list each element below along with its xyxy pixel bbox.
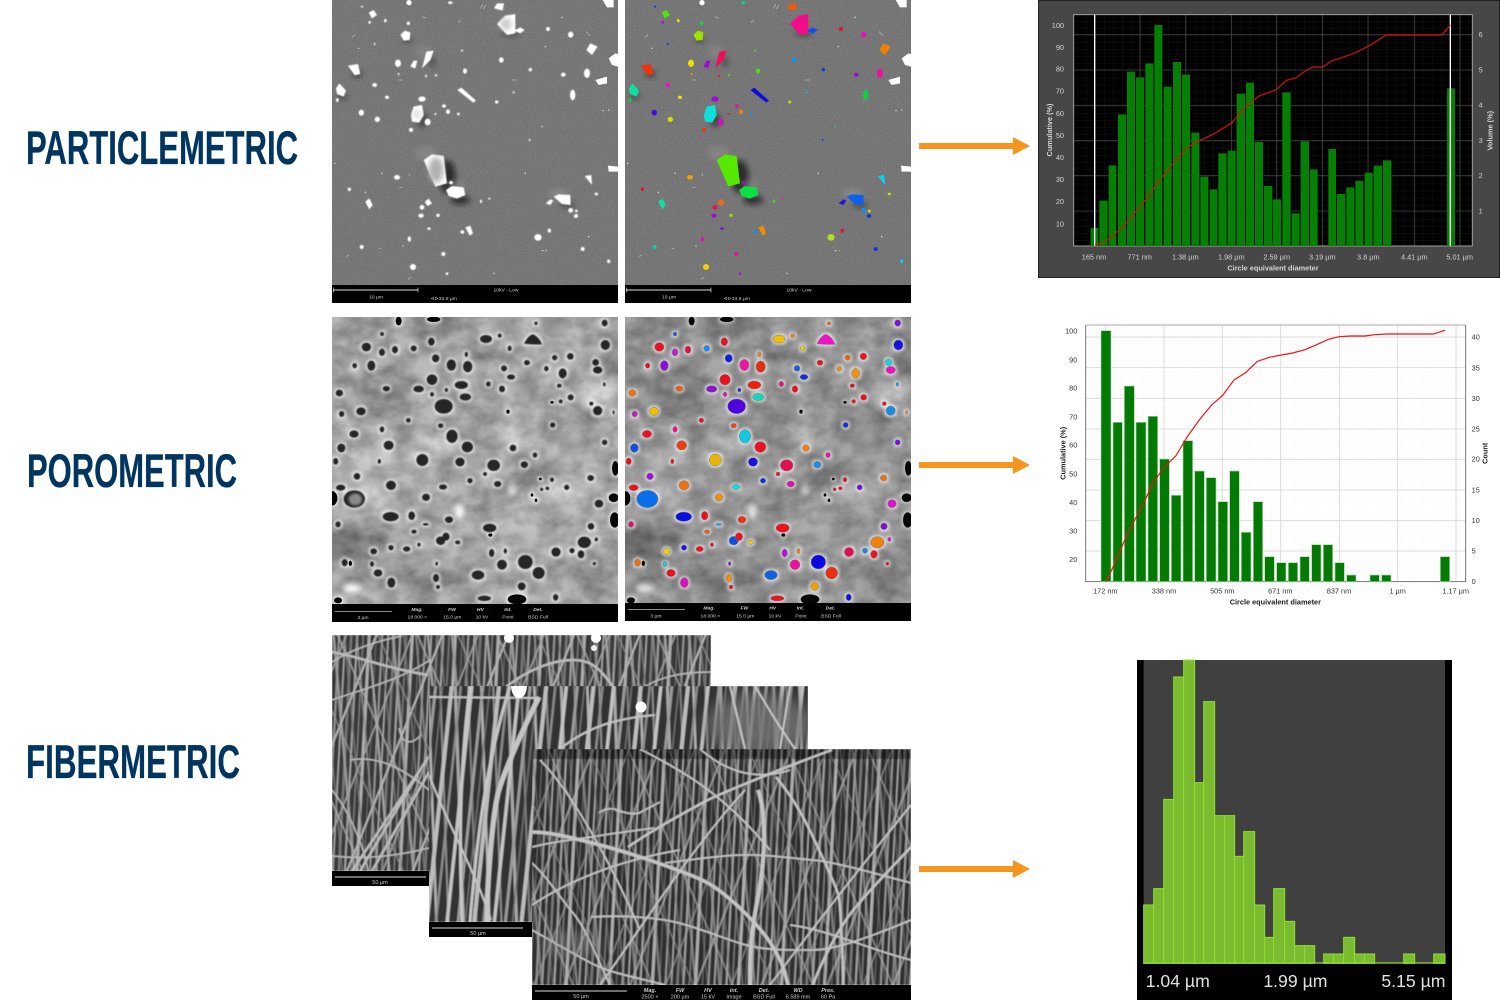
chart: particle size histogram, dark: 1.38 µm xyxy=(1172,253,1199,262)
panel: fiber SEM image, front: 50 µm xyxy=(573,994,589,1000)
chart: particle size histogram, dark: 90 xyxy=(1056,43,1064,52)
panel: pore SEM image, segmented xyxy=(612,308,918,621)
panel: fiber SEM image, front: WD xyxy=(793,988,803,994)
panel: pore SEM image, segmented: 10 kV xyxy=(769,613,782,619)
chart: particle size histogram, dark: 100 xyxy=(1052,21,1064,30)
chart: particle size histogram, dark: 50 xyxy=(1056,131,1064,140)
panel: pore SEM image, raw: BSD Full xyxy=(528,615,548,621)
chart: particle size histogram, dark: 165 nm xyxy=(1082,253,1106,262)
chart: pore size histogram, light xyxy=(1058,325,1489,607)
chart: pore size histogram, light: 50 xyxy=(1069,469,1077,478)
chart: pore size histogram, light: 30 xyxy=(1472,394,1480,403)
chart: pore size histogram, light: 671 nm xyxy=(1268,587,1293,596)
panel: particle SEM image, raw xyxy=(332,0,618,303)
panel: pore SEM image, segmented: FW xyxy=(740,606,750,612)
panel: pore SEM image, raw: Mag. xyxy=(411,607,423,613)
heading: POROMETRIC: POROMETRIC xyxy=(27,444,237,497)
panel: fiber SEM image, front: Int. xyxy=(730,988,739,994)
chart: particle size histogram, dark: Circle equivalent diameter xyxy=(1227,264,1319,273)
panel: fiber SEM image, front: FW xyxy=(676,988,685,994)
chart: pore size histogram, light: 837 nm xyxy=(1327,587,1351,596)
chart: particle size histogram, dark: 5 xyxy=(1479,65,1483,74)
chart: pore size histogram, light: 172 nm xyxy=(1093,587,1118,596)
chart: pore size histogram, light: 0 xyxy=(1472,577,1476,586)
chart: particle size histogram, dark: 3.19 µm xyxy=(1309,253,1336,262)
panel: particle SEM image, segmented: ⊲⊳33.6 µm xyxy=(723,296,750,302)
chart: pore size histogram, light: Cumulative (%) xyxy=(1058,426,1067,480)
panel: particle SEM image, segmented: 10kV - Low xyxy=(787,288,812,294)
chart: fiber diameter histogram xyxy=(1137,660,1452,1000)
chart: pore size histogram, light: 90 xyxy=(1069,355,1077,364)
panel: particle SEM image, raw: 10kV - Low xyxy=(494,288,519,294)
chart: fiber diameter histogram: 1.99 µm xyxy=(1263,971,1327,991)
chart: pore size histogram, light: 15 xyxy=(1472,485,1480,494)
chart: pore size histogram, light: Count xyxy=(1480,442,1489,464)
chart: particle size histogram, dark: 6 xyxy=(1479,30,1483,39)
arrow: pore image to chart xyxy=(919,456,1030,474)
chart: particle size histogram, dark: 4.41 µm xyxy=(1401,253,1428,262)
panel: fiber SEM image, front: Det. xyxy=(759,988,770,994)
chart: pore size histogram, light: 1 µm xyxy=(1389,587,1406,596)
panel: pore SEM image, segmented: 3 µm xyxy=(650,614,662,620)
chart: pore size histogram, light: 20 xyxy=(1472,455,1480,464)
panel: pore SEM image, raw: FW xyxy=(448,607,457,613)
panel: pore SEM image, raw: HV xyxy=(477,607,484,613)
chart: particle size histogram, dark: 5.01 µm xyxy=(1446,253,1473,262)
bars xyxy=(1091,25,1455,246)
chart: pore size histogram, light: 70 xyxy=(1069,412,1077,421)
chart: particle size histogram, dark: 2 xyxy=(1479,171,1483,180)
chart: pore size histogram, light: 40 xyxy=(1069,498,1077,507)
chart: particle size histogram, dark: 3.8 µm xyxy=(1357,253,1380,262)
panel: pore SEM image, raw: Int. xyxy=(504,607,512,613)
chart: particle size histogram, dark: 30 xyxy=(1056,175,1064,184)
chart: particle size histogram, dark: 1.98 µm xyxy=(1218,253,1245,262)
panel: pore SEM image, raw: 18 000 × xyxy=(408,615,427,621)
chart: particle size histogram, dark: 2.59 µm xyxy=(1263,253,1290,262)
chart: pore size histogram, light: 35 xyxy=(1472,363,1480,372)
chart: particle size histogram, dark: 80 xyxy=(1056,65,1064,74)
chart: particle size histogram, dark: 4 xyxy=(1479,101,1483,110)
chart: pore size histogram, light: 40 xyxy=(1472,333,1480,342)
panel: fiber SEM image, middle xyxy=(429,686,815,937)
chart: pore size histogram, light: 5 xyxy=(1472,546,1476,555)
chart: pore size histogram, light: 100 xyxy=(1065,327,1077,336)
panel: pore SEM image, raw xyxy=(319,308,625,622)
chart: pore size histogram, light: 25 xyxy=(1472,425,1480,434)
panel: pore SEM image, segmented: 18 000 × xyxy=(701,613,720,619)
arrow: fiber image to chart xyxy=(919,860,1030,878)
chart: pore size histogram, light: 80 xyxy=(1069,384,1077,393)
chart: pore size histogram, light: 20 xyxy=(1069,555,1077,564)
panel: fiber SEM image, front: Mag. xyxy=(644,988,657,994)
panel: pore SEM image, raw: 10 kV xyxy=(476,615,489,621)
chart: particle size histogram, dark: 70 xyxy=(1056,87,1064,96)
heading: PARTICLEMETRIC: PARTICLEMETRIC xyxy=(26,121,298,174)
chart: particle size histogram, dark xyxy=(1038,0,1500,278)
chart: pore size histogram, light: 30 xyxy=(1069,526,1077,535)
heading: FIBERMETRIC: FIBERMETRIC xyxy=(26,735,240,788)
panel: fiber SEM image, front: Pres. xyxy=(821,988,835,994)
panel: fiber SEM image, middle: 50 µm xyxy=(470,931,486,937)
chart: pore size histogram, light: 1.17 µm xyxy=(1442,587,1469,596)
panel: pore SEM image, segmented: HV xyxy=(769,606,777,612)
cumulative curve xyxy=(1095,25,1450,245)
panel: pore SEM image, raw: Point xyxy=(502,615,514,621)
chart: particle size histogram, dark: 771 nm xyxy=(1127,253,1152,262)
panel: particle SEM image, raw: ⊲⊳33.6 µm xyxy=(430,296,457,302)
panel: fiber SEM image, front xyxy=(532,749,911,1000)
panel: pore SEM image, segmented: Point xyxy=(795,613,807,619)
arrow: particle image to chart xyxy=(919,137,1030,155)
panel: particle SEM image, raw: 10 µm xyxy=(369,294,383,300)
chart: pore size histogram, light: 338 nm xyxy=(1152,587,1176,596)
panel: fiber SEM image, front: HV xyxy=(704,988,713,994)
chart: pore size histogram, light: Circle equivalent diameter xyxy=(1230,598,1321,607)
panel: fiber SEM image, back: 50 µm xyxy=(372,880,388,886)
panel: pore SEM image, segmented: Det. xyxy=(826,606,835,612)
panel: pore SEM image, segmented: Mag. xyxy=(703,606,715,612)
panel: pore SEM image, raw: 3 µm xyxy=(357,615,369,621)
chart: fiber diameter histogram: 1.04 µm xyxy=(1146,971,1210,991)
chart: particle size histogram, dark: Volume (%) xyxy=(1485,110,1494,150)
panel: pore SEM image, segmented: Int. xyxy=(797,606,804,612)
panel: particle SEM image, segmented: 10 µm xyxy=(662,294,676,300)
panel: pore SEM image, segmented: 15.0 µm xyxy=(736,613,754,619)
chart: pore size histogram, light: 60 xyxy=(1069,441,1077,450)
panel: particle SEM image, segmented xyxy=(625,0,911,303)
chart: particle size histogram, dark: 1 xyxy=(1479,206,1483,215)
chart: pore size histogram, light: 10 xyxy=(1472,516,1480,525)
chart: particle size histogram, dark: 40 xyxy=(1056,153,1064,162)
chart: pore size histogram, light: 505 nm xyxy=(1210,587,1235,596)
chart: particle size histogram, dark: 60 xyxy=(1056,109,1064,118)
chart: particle size histogram, dark: Cumulative (%) xyxy=(1045,103,1054,156)
panel: pore SEM image, raw: Det. xyxy=(533,607,543,613)
bars xyxy=(1101,331,1450,582)
cumulative curve xyxy=(1106,330,1445,582)
chart: particle size histogram, dark: 3 xyxy=(1479,136,1483,145)
bars xyxy=(1144,660,1445,963)
panel: pore SEM image, segmented: BSD Full xyxy=(821,613,841,619)
chart: fiber diameter histogram: 5.15 µm xyxy=(1381,971,1445,991)
chart: particle size histogram, dark: 20 xyxy=(1056,197,1064,206)
chart: particle size histogram, dark: 10 xyxy=(1056,219,1064,228)
panel: pore SEM image, raw: 15.0 µm xyxy=(443,615,461,621)
panel: fiber SEM image, back xyxy=(332,633,711,886)
